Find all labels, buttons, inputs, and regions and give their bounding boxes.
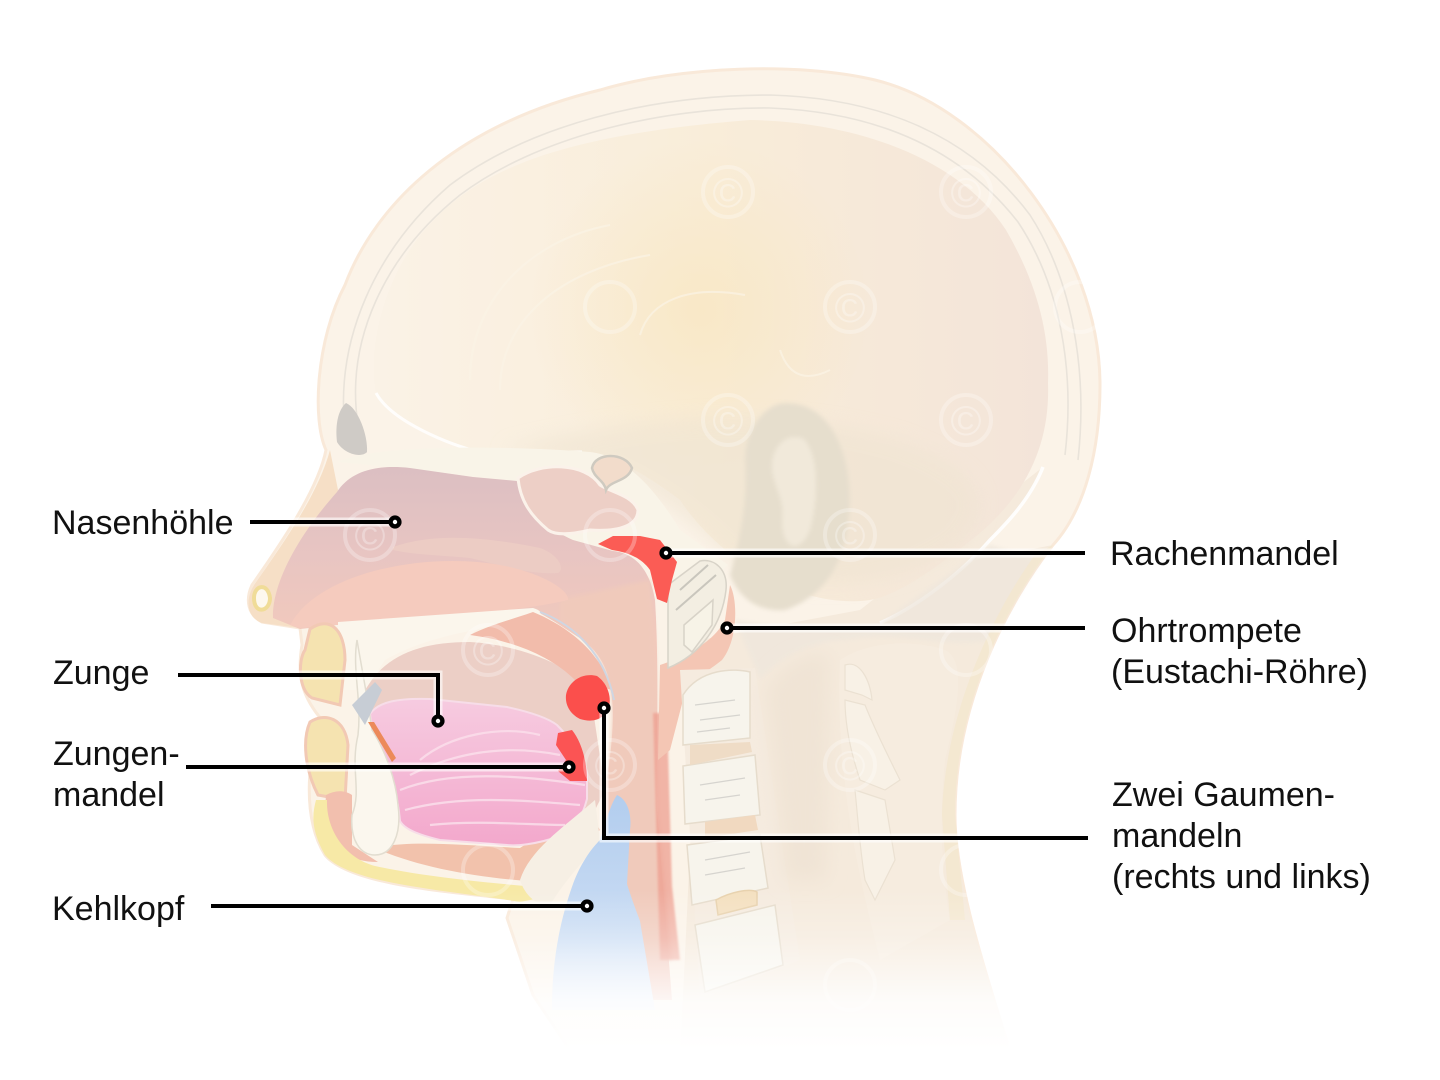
- cervical spine: [683, 670, 783, 992]
- sphenoid sinus: [518, 467, 638, 534]
- watermarks: ©: [835, 742, 866, 789]
- neck outer yellow band: [942, 545, 1053, 920]
- hyoid and epiglottis area: [520, 800, 600, 905]
- skull layer lines: [343, 95, 1081, 460]
- eustachian tube region: [658, 561, 735, 760]
- back of head and neck base tone: [680, 467, 1053, 1060]
- label: Kehlkopf: Kehlkopf: [52, 890, 185, 928]
- icon: frontal sinus: [336, 403, 367, 455]
- watermarks: ©: [713, 169, 744, 216]
- watermarks: ©: [951, 169, 982, 216]
- floor of mouth muscle: [375, 805, 600, 882]
- label: Zunge: Zunge: [53, 654, 149, 692]
- leader: Rachenmandel: [666, 551, 1085, 555]
- nose: [248, 450, 340, 628]
- label: Zungenmandel: mandel: [53, 776, 165, 814]
- pituitary and sella: [592, 456, 632, 490]
- leader: Kehlkopf: [211, 904, 587, 908]
- watermarks: ©: [355, 512, 386, 559]
- hard palate: [338, 608, 541, 690]
- leader: Ohrtrompete: [727, 626, 1085, 630]
- larynx airway: [552, 795, 655, 1010]
- nasal turbinates: [290, 538, 568, 628]
- skull base white line: [376, 393, 582, 453]
- tongue: [370, 699, 587, 845]
- neck shading band: [765, 654, 830, 880]
- mandible and tooth: [352, 640, 399, 855]
- pharynx lower tint: [560, 580, 672, 960]
- leader: Zungenmandel: [186, 765, 569, 769]
- leader: Nasenhöhle: [250, 520, 395, 524]
- chin muscle: [326, 791, 378, 862]
- watermarks: ©: [835, 284, 866, 331]
- leader lines: [178, 522, 1088, 906]
- bottom white cover: [440, 1049, 1080, 1080]
- soft palate: [470, 612, 612, 690]
- head silhouette: [248, 69, 1100, 1080]
- label: Zwei Gaumenmandeln: mandeln: [1112, 817, 1242, 855]
- occipital inner arc: [880, 467, 1043, 623]
- spine background: [680, 668, 800, 1000]
- pharynx posterior wall: [653, 713, 680, 960]
- leader: Zunge: [178, 675, 438, 721]
- label: Nasenhöhle: Nasenhöhle: [52, 504, 233, 542]
- watermarks: ©: [713, 397, 744, 444]
- label: Ohrtrompete: Ohrtrompete: [1111, 612, 1302, 650]
- watermarks: ©: [473, 627, 504, 674]
- soft palate edge line: [540, 612, 614, 700]
- label: Rachenmandel: Rachenmandel: [1110, 535, 1339, 573]
- nasal cavity and pharynx: [273, 467, 672, 1000]
- watermarks: ©: [835, 512, 866, 559]
- brain: [374, 120, 1048, 601]
- palatine tonsil (Gaumenmandel): [566, 675, 610, 721]
- lower lip: [306, 717, 348, 800]
- lingual tonsil (Zungenmandel): [556, 730, 587, 781]
- leader: Gaumenmandeln: [604, 708, 1088, 838]
- tongue muscle fibres: [400, 731, 585, 825]
- watermarks: ©: [595, 742, 626, 789]
- neck muscles: [839, 643, 958, 960]
- upper lip: [300, 624, 345, 705]
- adenoid tonsil (Rachenmandel): [598, 536, 677, 603]
- skull base bone: [338, 448, 728, 610]
- ear: [730, 403, 850, 610]
- watermarks: ©: [951, 397, 982, 444]
- mouth cavity: [365, 642, 605, 830]
- label: Zwei Gaumenmandeln: (rechts und links): [1112, 858, 1371, 896]
- label: Zungenmandel: Zungen-: [53, 735, 180, 773]
- upper neck shading: [735, 545, 1040, 680]
- chin fat layer: [313, 800, 545, 902]
- bottom fade: [440, 890, 1080, 1050]
- leader end dots: [391, 518, 731, 910]
- vertebra texture: [695, 700, 750, 875]
- watermarks: [345, 167, 1105, 1010]
- label: Ohrtrompete: (Eustachi-Röhre): [1111, 653, 1368, 691]
- label: Zwei Gaumenmandeln: Zwei Gaumen-: [1112, 776, 1335, 814]
